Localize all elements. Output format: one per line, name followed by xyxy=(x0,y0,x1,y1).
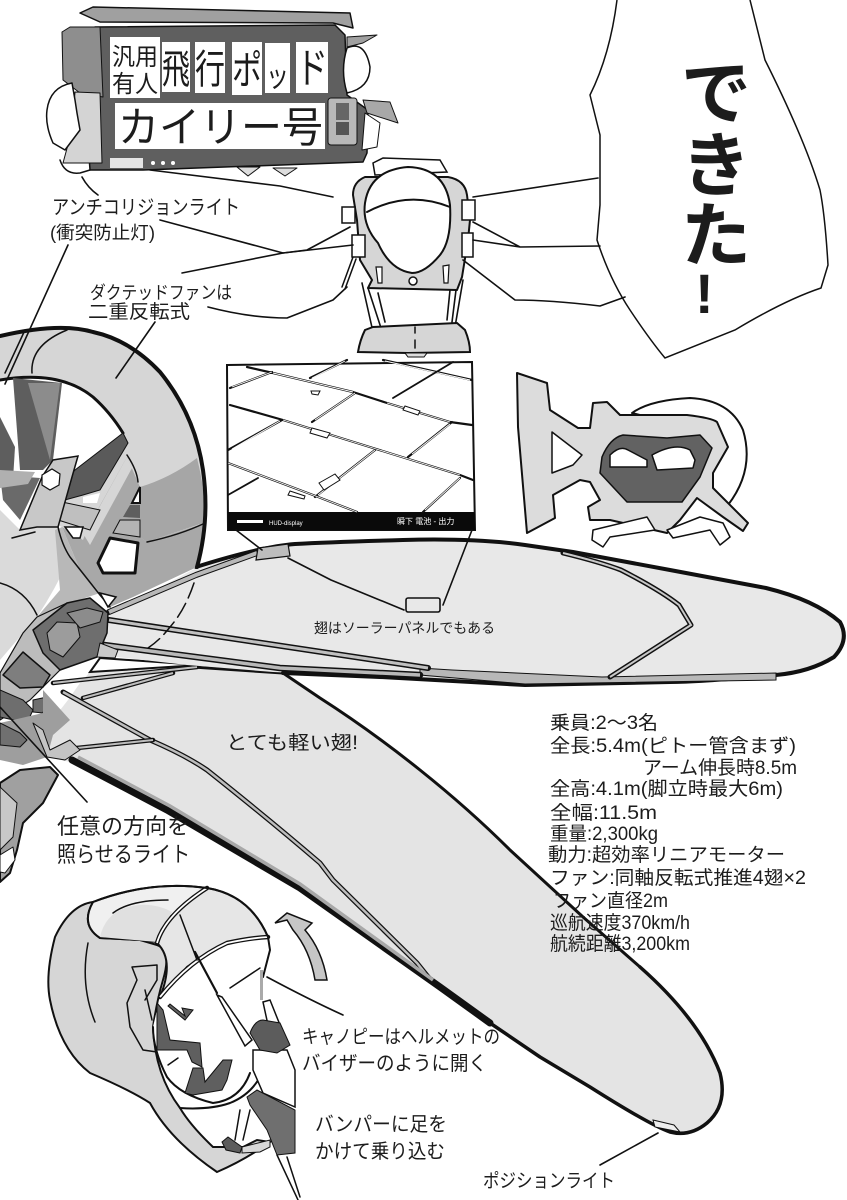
callout: できた! speech bubble: き xyxy=(681,127,751,205)
callout: できた! speech bubble: ! xyxy=(695,262,714,325)
label: anti-collision light: アンチコリジョンライト xyxy=(52,197,240,219)
label: ducted fan: 二重反転式 xyxy=(88,301,190,323)
panel data strip xyxy=(237,516,454,527)
title card text: 汎用有人: 有人 xyxy=(112,71,158,98)
text block: specifications: 乗員:2〜3名 xyxy=(550,712,658,734)
text block: specifications: 重量:2,300kg xyxy=(550,823,658,845)
title card text: 飛行ポッド: ド xyxy=(296,45,328,92)
label: light wing: とても軽い翅! xyxy=(226,732,358,754)
leader lines xyxy=(0,170,658,1165)
label: anti-collision light xyxy=(50,197,240,243)
label: wing solar panel: 翅はソーラーパネルでもある xyxy=(314,620,495,636)
panel data strip: HUD-display xyxy=(269,521,303,527)
icon: fan cube light xyxy=(42,469,60,490)
wing root joints xyxy=(0,598,118,882)
arrow: canopy opening direction xyxy=(275,913,327,980)
label: bumper: バンパーに足を xyxy=(315,1114,447,1136)
panel: upper wing xyxy=(100,540,844,685)
cockpit seat xyxy=(127,965,157,1052)
text block: specifications: 航続距離3,200km xyxy=(550,933,690,955)
label: directional light: 照らせるライト xyxy=(57,842,190,867)
hub body xyxy=(0,510,70,660)
fan duct illustration xyxy=(0,328,206,660)
panel: helmet cockpit xyxy=(48,886,270,1172)
figure: girl climbing into cockpit xyxy=(217,970,300,1200)
icon: position light xyxy=(653,1120,680,1132)
ring xyxy=(0,328,205,607)
title card text: 飛行ポッド xyxy=(162,42,328,95)
pod lights xyxy=(342,200,475,257)
icon: solar panel marker on wing xyxy=(256,544,440,612)
label: anti-collision light: (衝突防止灯) xyxy=(50,223,155,243)
label: bumper: かけて乗り込む xyxy=(315,1140,445,1163)
text block: specifications: ファン:同軸反転式推進4翅×2 xyxy=(550,867,806,889)
text block: specifications: 全幅:11.5m xyxy=(550,802,657,824)
text block: specifications: 巡航速度370km/h xyxy=(550,912,690,934)
callout: できた! speech bubble: で xyxy=(681,55,751,133)
label: position light: ポジションライト xyxy=(483,1170,615,1192)
callout: できた! speech bubble xyxy=(590,0,828,358)
label: canopy xyxy=(302,1027,500,1075)
text block: specifications: 全長:5.4m(ピトー管含まず) xyxy=(550,735,796,757)
text block: specifications: アーム伸長時8.5m xyxy=(643,757,797,779)
label: bumper xyxy=(315,1114,447,1163)
solar panel closeup xyxy=(227,360,475,530)
title plate xyxy=(47,7,398,176)
text block: specifications: ファン直径2m xyxy=(553,890,668,912)
fan windows xyxy=(132,487,140,503)
label: canopy: バイザーのように開く xyxy=(302,1053,487,1075)
label: ducted fan: ダクテッドファンは xyxy=(90,283,232,303)
title card text: 飛行ポッド: 行 xyxy=(195,48,225,92)
panel: lower wing xyxy=(47,658,722,1133)
pod front cross-section xyxy=(517,373,748,547)
lower wing spars xyxy=(53,658,490,1023)
text block: specifications xyxy=(548,712,806,955)
title card text: 飛行ポッド: ッ xyxy=(266,61,289,94)
label: ducted fan xyxy=(88,283,232,323)
text block: specifications: 動力:超効率リニアモーター xyxy=(548,844,785,866)
upper wing spars xyxy=(104,553,776,684)
label: canopy: キャノピーはヘルメットの xyxy=(302,1027,500,1048)
pod rear view xyxy=(342,158,475,357)
title card text: 汎用有人: 汎用 xyxy=(112,44,158,71)
title card text: 飛行ポッド: 飛 xyxy=(162,48,190,92)
callout: できた! speech bubble: た xyxy=(681,197,751,275)
label: directional light: 任意の方向を xyxy=(57,814,189,839)
fan blades opening xyxy=(0,377,128,530)
panel data strip: 瞬下 電池 - 出力 xyxy=(397,516,454,526)
label: directional light xyxy=(57,814,190,867)
title card text: カイリー号: カイリー号 xyxy=(118,104,323,151)
title card text: 汎用有人 xyxy=(110,37,160,98)
title card text: 飛行ポッド: ポ xyxy=(232,49,262,93)
text block: specifications: 全高:4.1m(脚立時最大6m) xyxy=(550,778,783,800)
